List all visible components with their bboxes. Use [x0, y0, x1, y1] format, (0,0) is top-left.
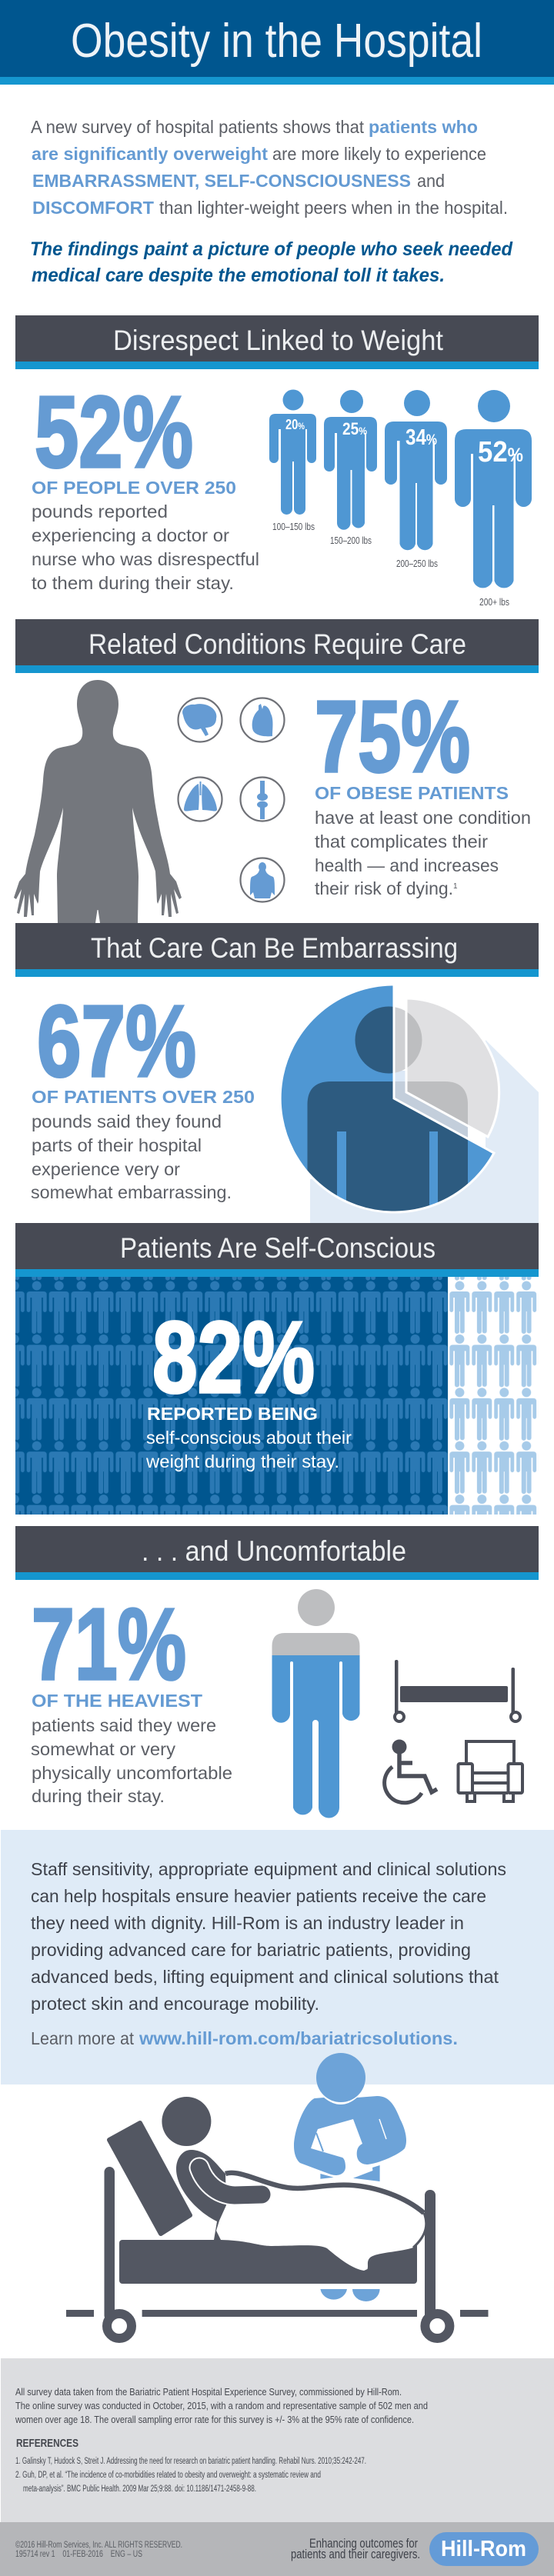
person 100-150 lbs: 20%: [285, 417, 305, 432]
illustration: nurse: [294, 2053, 406, 2301]
chart: people by weight: [269, 389, 532, 608]
stat: 71 percent: patients said they were: [32, 1715, 216, 1735]
closing text: can help hospitals ensure heavier patients receive the care: [31, 1886, 486, 1906]
intro emphasis statement: [30, 238, 513, 286]
stat: 67 percent: 67%: [37, 985, 196, 1098]
section heading: self-conscious: [15, 1223, 539, 1277]
intro emphasis statement: The findings paint a picture of people who seek needed: [30, 238, 513, 260]
copyright: 195714 rev 1 01-FEB-2016 ENG – US: [15, 2550, 142, 2559]
section heading: related conditions: [15, 619, 539, 673]
closing text: advanced beds, lifting equipment and clinical solutions that: [31, 1967, 499, 1987]
icon: wheelchair: [385, 1740, 437, 1803]
survey note: All survey data taken from the Bariatric Patient Hospital Experience Survey, commissioned by Hill-Rom.: [15, 2386, 402, 2398]
intro text block: EMBARRASSMENT, SELF-CONSCIOUSNESS: [32, 171, 411, 191]
person 150-200 lbs: 25%: [342, 419, 367, 438]
stat: 71 percent: [31, 1588, 232, 1806]
icon: lungs: [179, 777, 222, 821]
closing text: Staff sensitivity, appropriate equipment and clinical solutions: [31, 1859, 506, 1879]
stat: 82 percent: weight during their stay.: [145, 1451, 339, 1471]
stat: 82 percent: self-conscious about their: [146, 1428, 352, 1448]
stat: 71 percent: somewhat or very: [31, 1739, 175, 1759]
section heading: related conditions: Related Conditions Require Care: [88, 628, 466, 660]
stat: 75 percent: [315, 680, 531, 898]
intro text block: [31, 117, 508, 218]
stat: 75 percent: their risk of dying.: [315, 878, 453, 898]
stat: 67 percent: experience very or: [32, 1159, 180, 1179]
survey note: [15, 2386, 428, 2425]
icon: knee joint: [240, 777, 285, 821]
tagline: Enhancing outcomes for: [309, 2537, 418, 2551]
icon: brain: [179, 698, 222, 741]
person 200+ lbs: [455, 390, 532, 608]
stat: 75 percent: OF OBESE PATIENTS: [315, 783, 509, 803]
tagline: [291, 2537, 420, 2561]
person 200+ lbs: 52%: [478, 436, 523, 468]
stat: 67 percent: [31, 985, 255, 1202]
person 200-250 lbs: 34%: [405, 425, 437, 450]
references: 1. Galinsky T, Hudock S, Streit J. Addressing the need for research on bariatric patient handling. Rehabil Nurs. 2010;35:242-247.: [15, 2457, 366, 2466]
icon: large person partly gray: [272, 1589, 360, 1818]
intro text block: are more likely to experience: [272, 144, 486, 164]
stat: 75 percent: that complicates their: [315, 831, 488, 851]
intro text block: DISCOMFORT: [32, 198, 155, 218]
section heading: disrespect: Disrespect Linked to Weight: [113, 325, 444, 356]
panel: people pattern: [15, 1277, 539, 1515]
closing text: [31, 1859, 506, 2014]
references: 2. Guh, DP, et al. “The incidence of co-morbidities related to obesity and overweight: a systematic review and: [15, 2471, 321, 2480]
copyright: ©2016 Hill-Rom Services, Inc. ALL RIGHTS RESERVED.: [15, 2541, 182, 2550]
panel: closing message: [1, 1830, 554, 2084]
section heading: embarrassing: [15, 923, 539, 977]
learn more link: www.hill-rom.com/bariatricsolutions.: [138, 2028, 458, 2048]
closing text: they need with dignity. Hill-Rom is an industry leader in: [31, 1913, 464, 1933]
intro text block: patients who: [369, 117, 478, 137]
stat: 67 percent: OF PATIENTS OVER 250: [32, 1087, 255, 1107]
closing text: protect skin and encourage mobility.: [31, 1994, 319, 2014]
stat: 52 percent: nurse who was disrespectful: [32, 549, 259, 569]
title: Obesity in the Hospital: [71, 15, 482, 68]
panel: survey notes and references: [1, 2358, 554, 2522]
references: meta-analysis”. BMC Public Health. 2009 Mar 25;9:88. doi: 10.1186/1471-2458-9-88.: [23, 2484, 256, 2494]
stat: 82 percent: REPORTED BEING: [147, 1404, 318, 1424]
copyright: [15, 2541, 182, 2559]
closing text: providing advanced care for bariatric patients, providing: [31, 1940, 471, 1960]
stat: 75 percent: 75%: [315, 680, 470, 793]
stat: 52 percent: to them during their stay.: [32, 573, 234, 593]
icon: heart: [240, 698, 285, 741]
icon: torso: [240, 858, 285, 901]
person 200-250 lbs: [385, 390, 447, 569]
icon: armchair: [459, 1741, 522, 1801]
stat: 52 percent: [32, 375, 259, 593]
person 150-200 lbs: 150–200 lbs: [330, 535, 372, 546]
intro text block: A new survey of hospital patients shows that: [31, 117, 364, 137]
learn more link: Learn more at: [31, 2028, 134, 2048]
stat: 75 percent: have at least one condition: [315, 808, 531, 828]
logo: Hill-Rom: [429, 2532, 539, 2566]
stat: 71 percent: physically uncomfortable: [32, 1763, 232, 1783]
stat: 71 percent: during their stay.: [32, 1786, 165, 1806]
tagline: patients and their caregivers.: [291, 2548, 420, 2561]
section heading: uncomfortable: [15, 1526, 539, 1580]
stat: 82 percent: 82%: [152, 1301, 315, 1414]
stat: 82 percent: [145, 1301, 352, 1471]
section heading: embarrassing: That Care Can Be Embarrassing: [91, 932, 458, 964]
stat: 67 percent: somewhat embarrassing.: [31, 1182, 232, 1202]
intro emphasis statement: medical care despite the emotional toll it takes.: [32, 265, 445, 286]
footer band: [0, 2522, 554, 2576]
title banner: [0, 0, 554, 85]
intro text block: and: [417, 171, 445, 191]
icon: bed: [395, 1660, 520, 1721]
stat: 67 percent: pounds said they found: [32, 1111, 222, 1131]
chart: pie with person: [280, 985, 539, 1231]
section heading: uncomfortable: . . . and Uncomfortable: [142, 1535, 406, 1567]
section heading: self-conscious: Patients Are Self-Conscious: [120, 1232, 436, 1264]
person 100-150 lbs: 100–150 lbs: [272, 522, 315, 532]
section heading: disrespect: [15, 315, 539, 369]
stat: 52 percent: pounds reported: [32, 502, 168, 522]
logo: Hill-Rom: Hill-Rom: [441, 2537, 526, 2561]
person 150-200 lbs: [324, 390, 377, 546]
stat: 52 percent: experiencing a doctor or: [32, 525, 229, 545]
stat: 75 percent: 1: [453, 882, 458, 891]
person 100-150 lbs: [269, 389, 316, 532]
stat: 71 percent: 71%: [32, 1588, 186, 1701]
references: REFERENCES: [16, 2438, 78, 2450]
stat: 71 percent: OF THE HEAVIEST: [32, 1691, 202, 1711]
person 200-250 lbs: 200–250 lbs: [396, 558, 438, 569]
stat: 52 percent: 52%: [35, 375, 193, 488]
person 200+ lbs: 200+ lbs: [479, 597, 509, 608]
stat: 52 percent: OF PEOPLE OVER 250: [32, 478, 236, 498]
survey note: The online survey was conducted in October, 2015, with a random and representative sample of 502 men and: [15, 2400, 428, 2411]
survey note: women over age 18. The overall sampling error rate for this survey is +/- 3% at the 95% rate of confidence.: [15, 2414, 414, 2425]
stat: 67 percent: parts of their hospital: [32, 1135, 202, 1155]
stat: 75 percent: health — and increases: [315, 855, 499, 875]
icon: human silhouette: [14, 680, 182, 923]
intro text block: than lighter-weight peers when in the hospital.: [159, 198, 508, 218]
references: [15, 2438, 366, 2494]
intro text block: are significantly overweight: [32, 144, 268, 164]
illustration: patient in bed: [66, 2097, 488, 2338]
